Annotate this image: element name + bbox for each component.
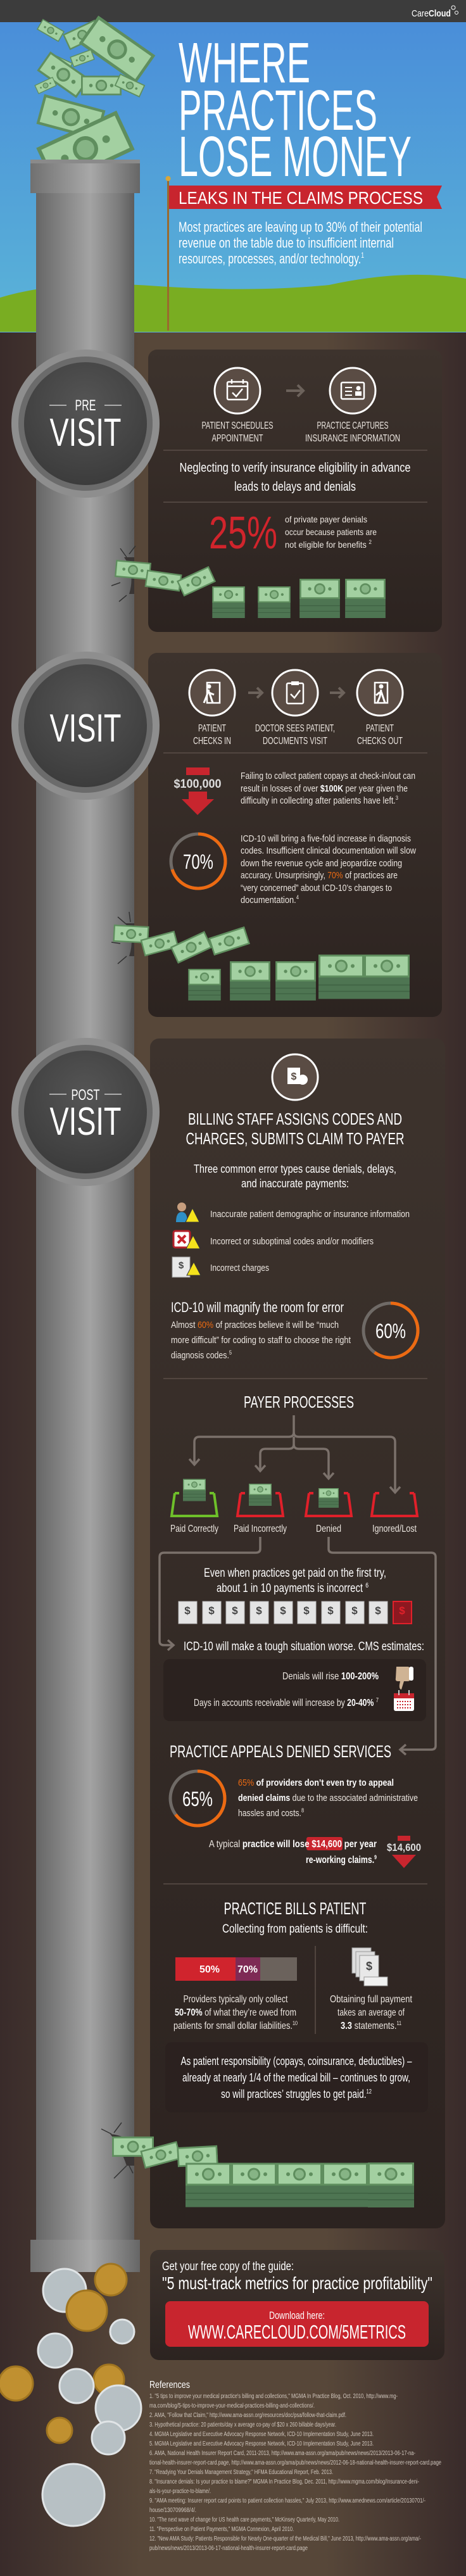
banner: leaks in the claims process: LEAKS IN THE CLAIMS PROCESS xyxy=(179,188,423,208)
references: 10. "The next wave of change for US health care payments," McKinsey Quarterly, May 2010. xyxy=(149,2516,339,2523)
outcome: ignored/lost: Ignored/Lost xyxy=(372,1524,417,1534)
flow arrows xyxy=(160,1537,436,1755)
download button xyxy=(165,2301,429,2347)
coins spilling xyxy=(0,2264,141,2526)
statement: leads to delays and denials xyxy=(234,480,356,494)
collect text xyxy=(173,1994,298,2031)
appeals text: hassles and costs. xyxy=(238,1808,316,1819)
collect text: Providers typically only collect xyxy=(184,1994,288,2005)
ring: 65% xyxy=(170,1771,225,1826)
stat: 25%: 2 xyxy=(368,539,372,545)
ICD-10 text xyxy=(241,833,416,906)
error types intro xyxy=(194,1163,396,1190)
rework loss text xyxy=(209,1837,377,1866)
ICD-10 magnify: diagnosis codes. xyxy=(171,1350,242,1361)
icon: red x xyxy=(173,1231,200,1249)
step labels: CHECKS IN xyxy=(193,736,231,747)
ring: 60% xyxy=(363,1303,418,1358)
rework loss text: 9 xyxy=(374,1854,377,1860)
error types intro: Three common error types cause denials, delays, xyxy=(194,1163,396,1175)
ICD-10 magnify: 5 xyxy=(229,1349,232,1356)
outcome: paid correctly: Paid Correctly xyxy=(170,1524,218,1534)
icon: statements: $ xyxy=(366,1960,372,1973)
badge: post visit: POST xyxy=(71,1087,100,1104)
error list: Incorrect or suboptimal codes and/or modifiers xyxy=(210,1236,374,1247)
leaking money xyxy=(101,2123,414,2207)
error list xyxy=(172,1203,410,1277)
references: 5. MGMA Legislative and Executive Advocacy Response Network, ICD-10 Implementation Study, June 2013. xyxy=(149,2440,374,2447)
logo: CareCloud xyxy=(412,8,451,19)
references: pub/news/news/2013/2013-06-17-national-health-insurer-report-card.page xyxy=(149,2545,308,2552)
stat: 25% xyxy=(209,508,377,559)
icon: calendar xyxy=(215,368,260,414)
step labels: PRACTICE CAPTURES xyxy=(317,420,389,431)
10 payment docs: $ xyxy=(256,1605,262,1617)
title: WHERE xyxy=(179,32,310,95)
icon: patient checks in xyxy=(189,670,235,716)
icon: charge doc: $ xyxy=(179,1260,184,1271)
ICD-10 text: ICD-10 will bring a five-fold increase in diagnosis xyxy=(241,833,411,844)
collect text: 50-70% of what they’re owed from xyxy=(175,2007,296,2018)
ICD-10 text: “very concerned” about ICD-10’s changes to xyxy=(241,883,392,893)
appeals text: 8 xyxy=(301,1807,304,1814)
step labels: APPOINTMENT xyxy=(211,433,263,444)
heading: practice bills patient: PRACTICE BILLS PATIENT xyxy=(224,1899,366,1918)
statements text: takes an average of xyxy=(337,2007,405,2018)
collect text: 10 xyxy=(293,2020,298,2026)
outcome: paid incorrectly xyxy=(234,1484,287,1534)
download button: Download here: xyxy=(269,2309,325,2321)
references: 4. MGMA Legislative and Executive Advocacy Response Network, ICD-10 Implementation Study, June 2013. xyxy=(149,2431,374,2438)
badge: pre visit: PRE xyxy=(75,397,96,414)
error types intro: and inaccurate payments: xyxy=(241,1177,349,1190)
10 payment docs xyxy=(179,1601,412,1624)
bar: 50-70%: 70% xyxy=(237,1964,258,1975)
patient responsibility box xyxy=(165,2042,428,2112)
references: als-Is-your-practice-to-blame/. xyxy=(149,2488,211,2495)
icon: thumbs down xyxy=(396,1667,413,1689)
heading: payer processes: PAYER PROCESSES xyxy=(244,1392,354,1411)
panel: pre visit xyxy=(111,350,442,632)
intro paragraph xyxy=(179,219,422,267)
references: 2. AMA, "Follow that Claim," http://www.ama-assn.org/resources/doc/psa/follow-that-claim.pdf. xyxy=(149,2412,346,2419)
step labels: PATIENT xyxy=(366,723,394,734)
money flying from pipe top xyxy=(34,16,155,187)
10 payment docs: $ xyxy=(280,1605,286,1617)
copay text: 3 xyxy=(396,795,398,801)
references: 7. "Readying Your Denials Management Strategy," HFMA Educational Report, Feb. 2013. xyxy=(149,2469,333,2476)
first-try text: 6 xyxy=(365,1582,368,1589)
intro paragraph: 1 xyxy=(361,251,364,260)
bar: 50-70%: 50% xyxy=(199,1964,220,1975)
first-try text: about 1 in 10 payments is incorrect xyxy=(217,1582,403,1595)
icon: insurance card xyxy=(330,368,375,414)
references: ma.com/blog/5-tips-to-improve-your-medical-practices-billing-and-collections/. xyxy=(149,2402,315,2409)
icon: calendar xyxy=(394,1690,414,1711)
ICD-10 text: documentation. xyxy=(241,895,306,906)
10 payment docs: $ xyxy=(399,1605,405,1617)
references: house/130709968/4/. xyxy=(149,2507,196,2514)
ring: 60%: 60% xyxy=(375,1320,406,1342)
panel: call to action xyxy=(150,2250,444,2360)
10 payment docs: $ xyxy=(351,1605,358,1617)
pipe xyxy=(30,160,140,2272)
references: 3. Hypothetical practice: 20 patients/day x average co-pay of $20 x 260 billable days/year. xyxy=(149,2421,336,2428)
stat: 25%: not eligible for benefits xyxy=(285,540,374,550)
header bar xyxy=(0,0,466,22)
statements text: Obtaining full payment xyxy=(330,1994,412,2005)
10 payment docs: $ xyxy=(375,1605,381,1617)
badge: pre visit xyxy=(11,350,160,498)
icon: charge doc xyxy=(172,1257,201,1277)
badge: post visit: VISIT xyxy=(49,1100,122,1144)
icon: $14,600 down: $14,600 xyxy=(387,1841,421,1853)
step labels: PATIENT SCHEDULES xyxy=(201,420,274,431)
copay text: result in losses of over $100K per year given the xyxy=(241,783,408,794)
10 payment docs: $ xyxy=(184,1605,191,1617)
icon: $14,600 down xyxy=(387,1836,421,1868)
heading: practice bills patient xyxy=(222,1899,368,1936)
10 payment docs: $ xyxy=(303,1605,310,1617)
ICD-10 magnify xyxy=(171,1299,351,1361)
title xyxy=(179,32,412,189)
statements text: 11 xyxy=(396,2020,401,2026)
statement: Neglecting to verify insurance eligibility in advance xyxy=(180,461,410,475)
10 payment docs: $ xyxy=(327,1605,334,1617)
outcome: paid incorrectly: Paid Incorrectly xyxy=(234,1524,287,1534)
patient responsibility box: 12 xyxy=(367,2088,372,2095)
rework loss text: A typical practice will lose $14,600 per year xyxy=(209,1839,377,1850)
appeals text: denied claims due to the associated administrative xyxy=(238,1793,418,1803)
stat: 25%: of private payer denials xyxy=(285,514,367,524)
copay text: difficulty in collecting after patients have left. xyxy=(241,795,425,806)
ICD-10 text: accuracy. Unsurprisingly, 70% of practices are xyxy=(241,870,398,881)
10 payment docs: $ xyxy=(208,1605,215,1617)
step labels: DOCTOR SEES PATIENT, xyxy=(255,723,335,734)
step labels xyxy=(193,723,403,747)
patient responsibility box: so will practices’ struggles to get paid. xyxy=(221,2088,412,2100)
CMS estimates box: 7 xyxy=(376,1697,379,1704)
icon: statements xyxy=(352,1948,387,1986)
icon: $100,000 down: $100,000 xyxy=(173,778,222,791)
10 payment docs: $ xyxy=(232,1605,238,1617)
references: 11. "Perspective on Patient Payments," MGMA Connexion, April 2010. xyxy=(149,2526,294,2533)
heading: billing staff xyxy=(186,1109,404,1148)
references: References xyxy=(149,2380,190,2390)
statements text: 3.3 statements. xyxy=(341,2021,407,2031)
appeals text: 65% of providers don’t even try to appeal xyxy=(238,1777,394,1788)
ring: 70% xyxy=(171,834,225,888)
ICD-10 text: down the revenue cycle and jeopardize coding xyxy=(241,858,402,869)
sky xyxy=(0,22,466,332)
rework loss text: re-working claims. xyxy=(306,1855,395,1866)
CMS estimates box xyxy=(163,1659,426,1721)
icon: patient checks out xyxy=(357,670,403,716)
outcome: denied: Denied xyxy=(316,1524,341,1534)
ring: 65%: 65% xyxy=(182,1788,213,1810)
badge: pre visit: VISIT xyxy=(49,411,122,455)
step labels: PATIENT xyxy=(198,723,226,734)
stat: 25%: 25% xyxy=(209,508,277,559)
ICD-10 text: 4 xyxy=(296,894,299,900)
outcome: ignored/lost xyxy=(372,1493,417,1534)
CMS estimates box: Denials will rise 100-200% xyxy=(282,1671,379,1682)
flag pole xyxy=(166,176,171,331)
icon: billing hand: $ xyxy=(291,1071,297,1082)
outcome: denied xyxy=(306,1488,351,1534)
badge: visit xyxy=(11,652,160,800)
error list: Inaccurate patient demographic or insurance information xyxy=(210,1209,410,1220)
badge: post visit xyxy=(11,1038,160,1186)
panel: visit xyxy=(111,653,442,1017)
intro paragraph: revenue on the table due to insufficient internal xyxy=(179,235,394,251)
step labels: CHECKS OUT xyxy=(357,736,403,747)
icon: person warning xyxy=(176,1203,199,1222)
collect text: patients for small dollar liabilities. xyxy=(173,2021,322,2031)
statements text xyxy=(330,1994,412,2031)
leaking money xyxy=(111,912,410,1001)
step labels: DOCUMENTS VISIT xyxy=(263,736,327,747)
step labels: INSURANCE INFORMATION xyxy=(305,433,400,444)
leaking money xyxy=(111,546,386,618)
step labels xyxy=(201,420,400,444)
stat: 25%: occur because patients are xyxy=(285,527,377,537)
outcome: paid correctly xyxy=(170,1479,218,1534)
references xyxy=(149,2380,441,2552)
ICD-10 text: codes. Insufficient clinical documentation will slow xyxy=(241,845,416,856)
statement xyxy=(180,461,410,494)
ICD-10 magnify: Almost 60% of practices believe it will be “much xyxy=(171,1320,339,1330)
badge: visit: VISIT xyxy=(49,707,122,750)
arrow xyxy=(286,385,303,396)
ICD-10 magnify: ICD-10 will magnify the room for error xyxy=(171,1299,344,1315)
panel: post visit xyxy=(101,1039,445,2228)
ring: 70%: 70% xyxy=(183,850,213,873)
appeals text xyxy=(238,1777,418,1819)
ICD-10 magnify: more difficult” for coding to staff to choose the right xyxy=(171,1335,351,1346)
hills xyxy=(0,275,466,332)
copay text: Failing to collect patient copays at check-in/out can xyxy=(241,771,415,781)
intro paragraph: resources, processes, and/or technology. xyxy=(179,251,432,267)
first-try text: Even when practices get paid on the first try, xyxy=(204,1567,386,1580)
icon: $100,000 down xyxy=(173,767,222,815)
heading: practice bills patient: Collecting from patients is difficult: xyxy=(222,1923,368,1936)
tree arrows xyxy=(189,1415,400,1493)
panel: call to action: Get your free copy of the guide: xyxy=(162,2260,294,2273)
first-try text xyxy=(204,1567,386,1595)
icon: clipboard xyxy=(272,670,318,716)
copay text xyxy=(241,771,415,806)
bar: 50-70% xyxy=(175,1957,297,1981)
error list: Incorrect charges xyxy=(210,1263,269,1273)
CMS estimates box: Days in accounts receivable will increase by 20-40% xyxy=(194,1698,391,1708)
icon: billing hand xyxy=(272,1054,318,1100)
